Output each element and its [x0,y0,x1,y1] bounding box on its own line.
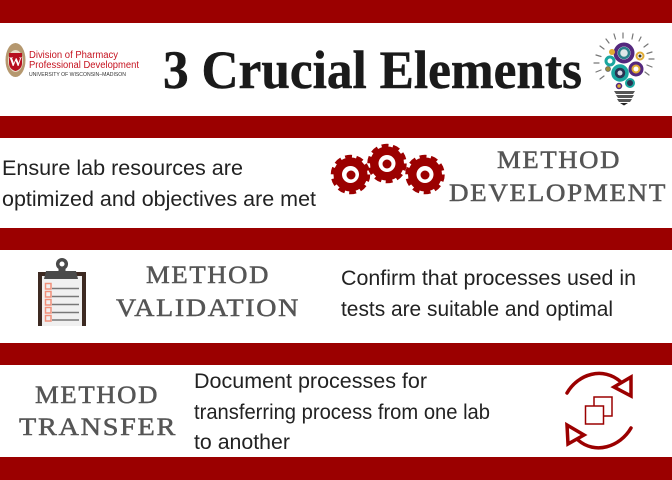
logo text: UNIVERSITY OF WISCONSIN–MADISON [29,72,126,78]
text: development description: Ensure lab resources are [2,156,243,180]
text: development description [2,156,316,211]
heading: method transfer [19,382,177,441]
logo text: Division of Pharmacy [29,50,118,61]
heading: method development [449,147,667,207]
bulb rays [594,33,654,79]
logo text: Professional Development [29,60,139,71]
icon: clipboard [38,260,86,326]
text: transfer description [194,369,490,454]
icon: crest: W [9,54,22,69]
heading: method validation: METHOD [146,262,270,289]
text: transfer description: transferring process from one lab [194,400,490,424]
gears [616,44,632,62]
text: validation description [341,266,636,321]
heading: method validation [116,262,300,322]
bulb base [614,91,635,102]
heading: method transfer: METHOD [35,382,159,409]
text: transfer description: to another [194,430,290,454]
icon: red gears [334,146,442,192]
icon: transfer arrows [567,373,631,448]
panel: method validation [38,260,636,326]
logo text [29,50,139,78]
heading: method development: METHOD [497,147,621,174]
panel: method development [2,146,667,211]
heading: method transfer: TRANSFER [19,414,177,441]
logo: Division of Pharmacy Professional Development [6,43,139,78]
panel: method transfer [19,369,631,454]
heading: method development: DEVELOPMENT [449,180,667,207]
heading: method validation: VALIDATION [116,295,300,322]
title: 3 Crucial Elements [163,40,582,100]
icon: light bulb with gears [594,33,654,106]
text: development description: optimized and objectives are met [2,187,316,211]
text: validation description: Confirm that processes used in [341,266,636,290]
text: validation description: tests are suitable and optimal [341,297,613,321]
text: transfer description: Document processes for [194,369,427,393]
